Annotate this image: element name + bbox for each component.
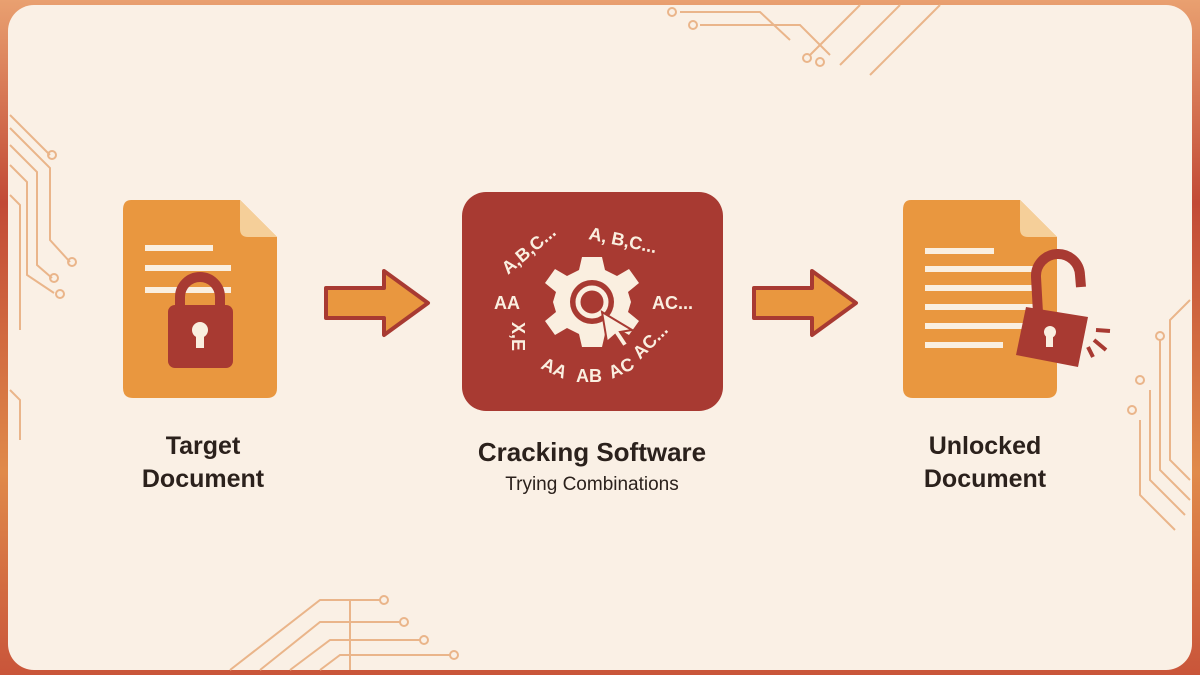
label: Target Document: Document — [142, 465, 264, 493]
label: Target Document — [142, 432, 264, 493]
panel: cracking software: AA — [494, 293, 520, 313]
label: Target Document: Target — [166, 432, 240, 460]
panel: cracking software: AA — [538, 353, 570, 383]
label: Unlocked Document: Document — [924, 465, 1046, 493]
icon: locked target document — [123, 200, 277, 398]
panel: cracking software: A,B,C... — [498, 222, 560, 278]
label: Cracking Software: Cracking Software — [478, 437, 706, 467]
subtitle: Trying Combinations: Trying Combinations — [505, 474, 679, 495]
arrow 2 — [752, 269, 858, 338]
label: Unlocked Document: Unlocked — [929, 432, 1041, 460]
panel: cracking software — [462, 192, 723, 411]
arrow 1 — [324, 269, 430, 338]
panel: cracking software: AC... — [652, 293, 693, 313]
panel: cracking software: AC... — [629, 320, 672, 363]
panel: cracking software: A, B,C... — [587, 223, 659, 257]
panel: cracking software: AC — [605, 354, 637, 383]
panel: cracking software: X,E — [508, 322, 528, 351]
icon: unlocked document — [903, 200, 1110, 398]
label: Unlocked Document — [924, 432, 1046, 493]
panel: cracking software: AB — [576, 366, 602, 386]
